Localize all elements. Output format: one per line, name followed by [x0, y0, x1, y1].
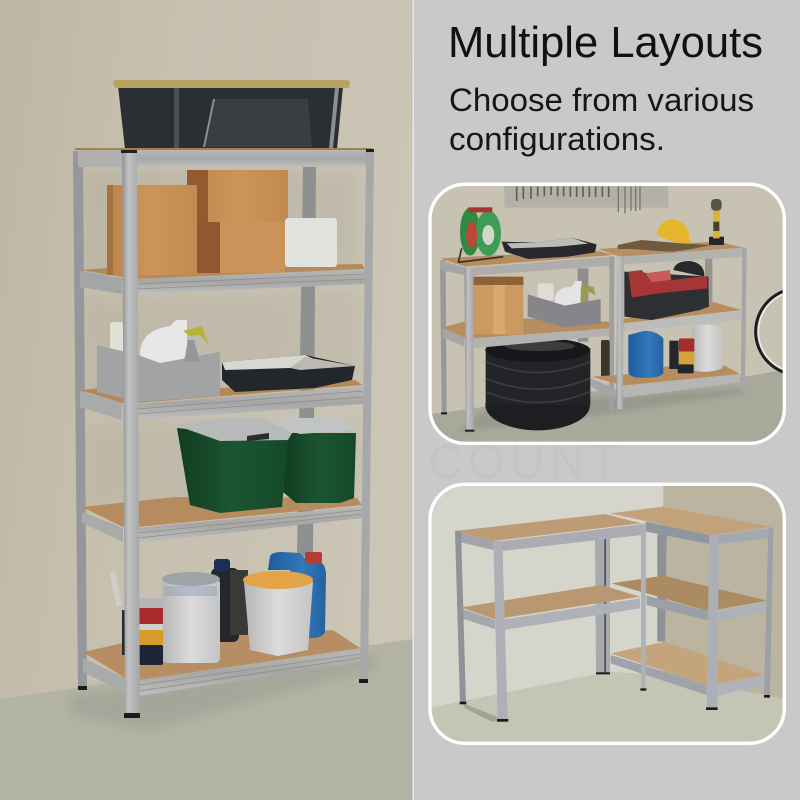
shelf 3 board — [80, 380, 363, 403]
floor — [430, 370, 784, 443]
item: hand tools — [618, 240, 712, 252]
item: dark oil bottle — [211, 559, 248, 642]
item: green storage bins — [175, 418, 357, 513]
shelf 2 board — [80, 264, 365, 279]
shelving unit front posts — [78, 149, 374, 718]
item: stacked small tins and brushes — [109, 572, 163, 665]
shelf 4 beams — [82, 506, 362, 543]
item: cordless drill — [709, 199, 724, 245]
item: white bucket with orange lid — [243, 571, 313, 656]
item: cable reel — [458, 207, 503, 262]
item: tool bag — [624, 261, 709, 320]
panel: garage side-by-side layout — [430, 184, 800, 443]
subheading: configurations. — [449, 121, 665, 157]
shelf 1 — [75, 148, 372, 167]
subheading: Choose from various — [449, 82, 754, 118]
item: spray bottle — [183, 326, 209, 362]
item: black storage tub — [113, 80, 350, 149]
shelf 5 board — [83, 630, 360, 680]
floor — [430, 672, 784, 743]
item: small bottles — [110, 322, 124, 352]
item: stacked tins — [669, 338, 694, 373]
item: paint tray — [502, 238, 597, 259]
panel: shelving unit photo — [0, 0, 413, 800]
left unit posts — [441, 257, 614, 432]
left unit shelves — [455, 514, 641, 630]
right unit shelves — [610, 507, 772, 696]
icon: bicycle wheel — [754, 290, 783, 374]
left unit boards — [440, 251, 613, 338]
left unit posts — [455, 523, 646, 722]
back posts — [440, 258, 712, 413]
shelf 2 beams — [80, 269, 365, 294]
item: cardboard boxes — [107, 170, 288, 275]
item: cardboard box — [473, 277, 523, 334]
heading: Multiple Layouts — [448, 18, 763, 67]
left unit beams — [440, 257, 610, 348]
shelving unit back posts — [73, 151, 316, 688]
item: gray caddy with bottles — [528, 281, 601, 328]
shelf 3 beams — [80, 386, 363, 420]
back posts — [595, 534, 667, 674]
item: clear plastic tub — [285, 218, 337, 267]
panel: info background — [414, 0, 800, 800]
right unit posts — [616, 248, 747, 409]
panel: corner L-shaped layout — [430, 484, 784, 743]
peg board — [504, 184, 668, 213]
shelf 4 board — [82, 497, 362, 527]
item: paint tray — [222, 355, 355, 392]
right unit posts — [706, 528, 773, 710]
item: hard hat — [657, 219, 692, 245]
divider strip — [412, 0, 414, 800]
item: dark bottle — [601, 340, 610, 378]
item: paint can — [162, 572, 220, 663]
item: stacked tires — [485, 338, 590, 430]
item: gray caddy — [97, 345, 220, 402]
item: silver paint can — [692, 325, 722, 372]
floor — [0, 639, 413, 800]
item: white jug — [140, 320, 187, 365]
item: blue jerry can — [268, 552, 326, 638]
right unit boards — [592, 242, 743, 386]
shelf 5 beams — [83, 650, 360, 696]
item: blue jerry can — [628, 331, 663, 378]
right unit beams — [591, 248, 743, 399]
